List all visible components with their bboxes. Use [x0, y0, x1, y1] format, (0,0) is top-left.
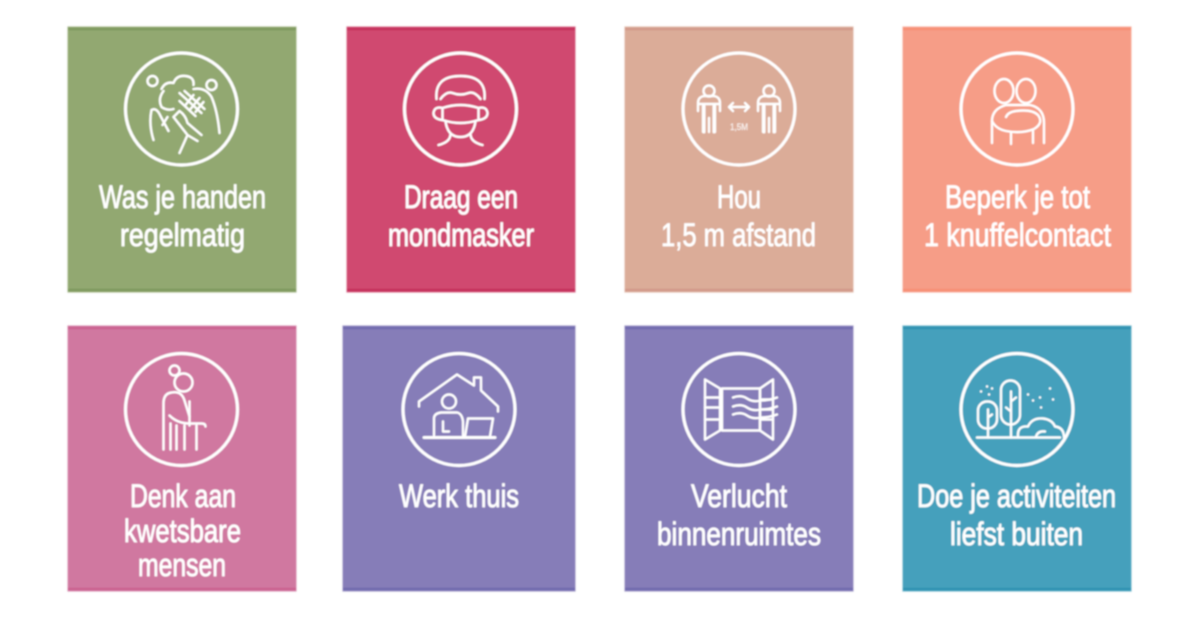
label: denk aan kwetsbare mensen: Denk aan — [130, 478, 236, 514]
label: hou 1,5 m afstand — [661, 179, 816, 253]
label: hou 1,5 m afstand: 1,5 m afstand — [661, 217, 816, 253]
label: beperk je tot 1 knuffelcontact: Beperk je tot — [945, 179, 1090, 215]
icon: bomen en struik — [961, 354, 1073, 466]
label: doe je activiteiten liefst buiten: Doe je activiteiten — [917, 478, 1116, 514]
label: beperk je tot 1 knuffelcontact: 1 knuffelcontact — [924, 217, 1111, 253]
label: doe je activiteiten liefst buiten — [917, 478, 1116, 552]
panel: kwetsbare mensen — [68, 326, 296, 591]
label: hou 1,5 m afstand: Hou — [717, 179, 761, 215]
icon: mondmasker — [404, 53, 516, 165]
label: doe je activiteiten liefst buiten: liefst buiten — [950, 516, 1083, 552]
label: was je handen regelmatig — [99, 179, 266, 253]
label: denk aan kwetsbare mensen: kwetsbare — [124, 513, 241, 549]
icon: knuffel — [961, 53, 1073, 165]
label: draag een mondmasker: mondmasker — [388, 217, 534, 253]
label: draag een mondmasker — [388, 179, 534, 253]
label: denk aan kwetsbare mensen — [124, 478, 241, 583]
icon: oudere met stok — [126, 354, 238, 466]
panel: afstand houden — [625, 27, 853, 292]
label: verlucht binnenruimtes — [657, 478, 821, 552]
panel: knuffelcontact — [903, 27, 1131, 292]
icon: 1,5 meter afstand: 1,5M — [730, 122, 748, 132]
panel: activiteiten buiten — [903, 326, 1131, 591]
icon: 1,5 meter afstand — [683, 53, 795, 165]
panel: thuiswerken — [343, 326, 575, 591]
icon: open raam met wind — [683, 354, 795, 466]
label: verlucht binnenruimtes: binnenruimtes — [657, 516, 821, 552]
label: denk aan kwetsbare mensen: mensen — [138, 547, 226, 583]
label: draag een mondmasker: Draag een — [404, 179, 518, 215]
panel: handen wassen — [68, 27, 296, 292]
icon: handen wassen — [126, 53, 238, 165]
label: verlucht binnenruimtes: Verlucht — [691, 478, 787, 514]
label: beperk je tot 1 knuffelcontact — [924, 179, 1111, 253]
label: was je handen regelmatig: regelmatig — [120, 217, 245, 253]
label: werk thuis: Werk thuis — [399, 478, 519, 514]
label: was je handen regelmatig: Was je handen — [99, 179, 266, 215]
panel: mondmasker — [347, 27, 575, 292]
panel: verluchten — [625, 326, 853, 591]
icon: werken vanuit huis — [403, 354, 515, 466]
